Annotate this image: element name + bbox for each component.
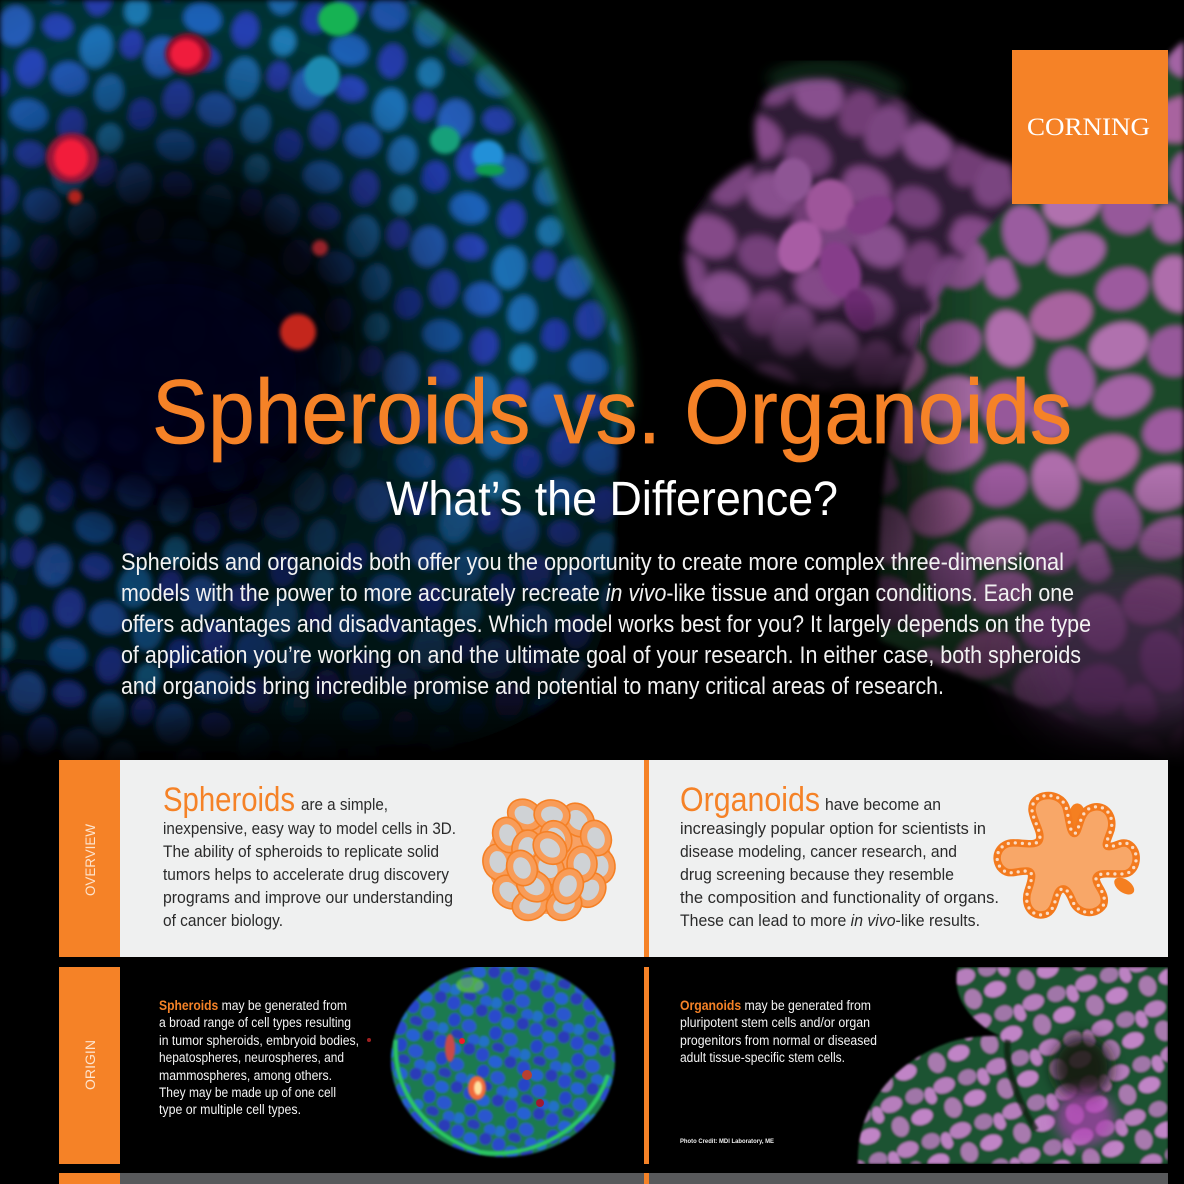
cover above the photo — [370, 957, 630, 967]
panel: spheroids overview: are a simple, — [301, 796, 388, 814]
panel: organoids origin — [680, 967, 1168, 1164]
panel: organoids overview — [649, 760, 1168, 957]
panel: organoids overview: have become an — [825, 796, 941, 814]
panel: organoids overview: the composition and functionality of organs. — [680, 889, 999, 907]
icon: spheroid cell cluster — [480, 793, 617, 925]
intro paragraph: models with the power to more accurately recreate in vivo-like tissue and organ conditions. Each one — [121, 580, 1074, 607]
intro paragraph: of application you’re working on and the ultimate goal of your research. In either case, both spheroids — [121, 642, 1081, 669]
panel: spheroids origin: mammospheres, among others. — [159, 1068, 332, 1083]
origin side tab — [59, 967, 120, 1164]
dark fade under lobe B — [850, 470, 1184, 770]
soft fade of the photo into the lower black area — [0, 700, 1184, 770]
Corning logo block: CORNING — [1027, 112, 1150, 141]
panel: organoids overview: disease modeling, cancer research, and — [680, 843, 957, 861]
panel: organoids overview: Organoids — [680, 781, 820, 819]
orange column divider — [644, 967, 649, 1164]
panel: spheroids overview: Spheroids — [163, 781, 295, 819]
overview side tab: OVERVIEW — [82, 823, 98, 896]
intro paragraph: Spheroids and organoids both offer you the opportunity to create more complex three-dimensional — [121, 549, 1064, 576]
organoid lobe B — [876, 38, 1184, 745]
panel: organoids origin: progenitors from normal or diseased — [680, 1033, 877, 1048]
panel: spheroids overview: of cancer biology. — [163, 912, 283, 930]
intro paragraph — [121, 549, 1091, 700]
intro paragraph: offers advantages and disadvantages. Which model works best for you? It largely depends on the type — [121, 611, 1091, 638]
panel: organoids origin: adult tissue-specific stem cells. — [680, 1050, 845, 1065]
row: overview — [59, 760, 1168, 957]
intro paragraph: and organoids bring incredible promise and potential to many critical areas of research. — [121, 673, 944, 700]
panel: spheroids origin: hepatospheres, neurospheres, and — [159, 1050, 344, 1065]
panel: spheroids overview: programs and improve our understanding — [163, 889, 453, 907]
organoid lobe A — [680, 72, 1016, 391]
photo: fluorescent spheroid — [367, 967, 617, 1159]
background photo: pink and green organoid — [660, 20, 1184, 780]
photo: pink and green organoid — [850, 960, 1170, 1170]
panel: organoids overview: These can lead to more in vivo-like results. — [680, 912, 980, 930]
panel: spheroids origin: They may be made up of one cell — [159, 1085, 336, 1100]
row: origin — [59, 957, 1170, 1170]
overview side tab — [59, 760, 120, 957]
bright nuclei on lobe A — [770, 158, 901, 335]
panel: spheroids overview: The ability of spheroids to replicate solid — [163, 843, 439, 861]
row: next section (cropped) — [59, 1173, 1168, 1184]
panel: spheroids origin: type or multiple cell types. — [159, 1102, 301, 1117]
panel: spheroids origin: a broad range of cell types resulting — [159, 1015, 351, 1030]
panel: spheroids overview — [120, 760, 644, 957]
panel: organoids origin: Organoids may be generated from — [680, 998, 871, 1013]
panel: spheroids overview: tumors helps to accelerate drug discovery — [163, 866, 450, 884]
panel: spheroids origin: Spheroids may be generated from — [159, 998, 347, 1013]
orange column divider — [644, 760, 649, 957]
photo credit: Photo Credit: MDI Laboratory, ME — [680, 1138, 775, 1145]
background photo: fluorescent spheroid — [0, 0, 660, 780]
panel: organoids overview: increasingly popular option for scientists in — [680, 820, 986, 838]
dark fade at the bottom of lobe A — [660, 300, 920, 410]
panel: organoids origin: pluripotent stem cells and/or organ — [680, 1015, 870, 1030]
red and green marker cells — [46, 2, 505, 350]
panel: organoids overview: drug screening because they resemble — [680, 866, 954, 884]
title: Spheroids vs. Organoids — [152, 362, 1072, 463]
Corning logo block — [1012, 50, 1168, 204]
origin side tab: ORIGIN — [82, 1040, 98, 1090]
panel: spheroids overview: inexpensive, easy way to model cells in 3D. — [163, 820, 456, 838]
subtitle: What’s the Difference? — [386, 473, 838, 526]
panel: spheroids origin — [159, 967, 617, 1159]
panel: spheroids origin: in tumor spheroids, embryoid bodies, — [159, 1033, 359, 1048]
icon: organoid star shape — [997, 796, 1137, 915]
